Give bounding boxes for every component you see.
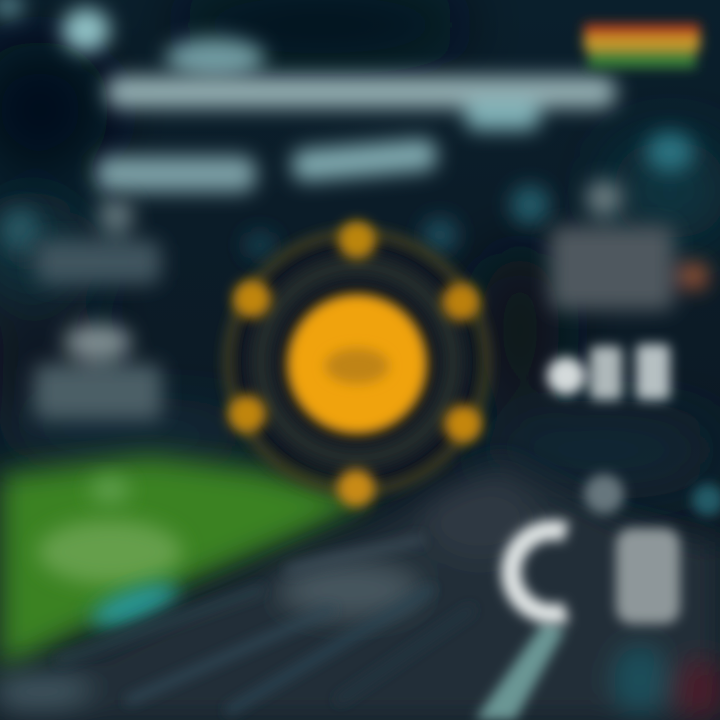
panel: left lower text block [34, 324, 162, 420]
crowd and stands [0, 460, 720, 720]
panel: right number block [547, 344, 670, 400]
crowd streaks [60, 540, 470, 710]
node: lower left [228, 395, 266, 433]
pitch: green field [0, 456, 370, 670]
background: dark and teal haze [0, 0, 720, 480]
title: blurred heading [96, 76, 616, 192]
panel: right upper text block [550, 180, 708, 310]
node: lower right [444, 405, 482, 443]
inner ring [261, 266, 453, 458]
stadium roof highlights [0, 0, 694, 259]
diagonal light beam [475, 620, 565, 720]
node: bottom [337, 469, 375, 507]
outer orbit ring [227, 232, 487, 492]
central hub diagram [227, 221, 487, 507]
node: upper left [233, 280, 271, 318]
center disc [287, 294, 427, 434]
panel: bottom right large number [511, 474, 720, 624]
node: upper right [442, 283, 480, 321]
icon: flag [584, 24, 700, 68]
panel: left upper text block [36, 198, 161, 284]
center disc glyph [325, 348, 389, 384]
node: top [338, 221, 376, 259]
